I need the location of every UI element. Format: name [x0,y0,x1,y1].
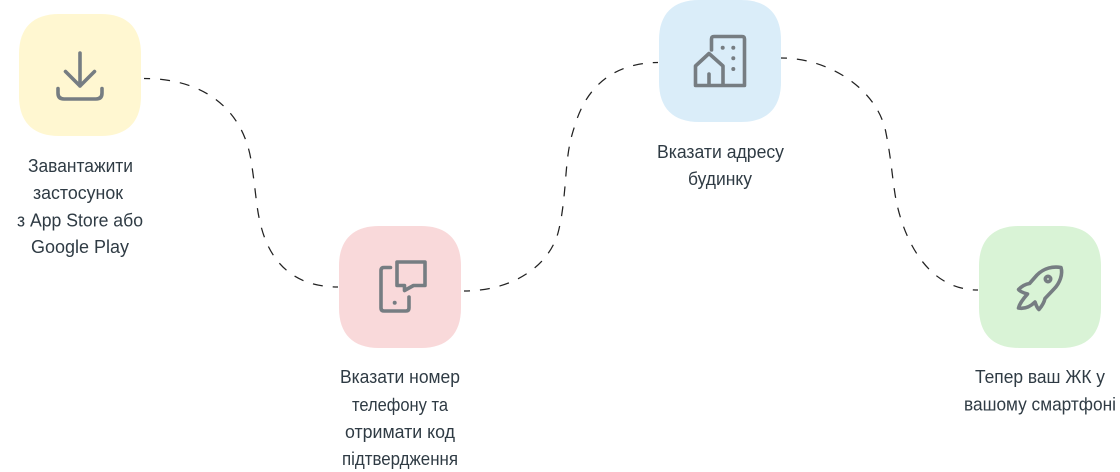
text: step 3 label [657,142,784,189]
text: step 1 label: з App Store або [17,210,143,230]
text: step 4 label: Тепер ваш ЖК у [975,367,1105,387]
text: step 2 label: телефону та [352,395,449,415]
text: step 4 label: вашому смартфоні [964,394,1116,414]
tile: yellow [19,14,141,136]
tile: green [979,226,1101,348]
tile: blue [659,0,781,122]
icon: phone with message bubble [381,262,425,311]
step 4: ready [964,226,1116,414]
step 1: download app [17,14,143,257]
connector: step 2 to step 3 [464,62,658,291]
text: step 3 label: будинку [688,169,752,189]
text: step 3 label: Вказати адресу [657,142,784,162]
text: step 2 label: отримати код [345,422,455,442]
icon: house and building [696,36,744,86]
text: step 1 label: Завантажити [28,156,133,176]
text: step 1 label: Google Play [31,237,129,257]
connector: step 3 to step 4 [781,58,978,290]
icon: download [58,53,102,99]
connector: step 1 to step 2 [144,78,338,287]
text: step 2 label [340,367,460,469]
text: step 2 label: підтвердження [342,449,458,469]
text: step 1 label [17,156,143,257]
tile: pink [339,226,461,348]
text: step 2 label: Вказати номер [340,367,460,387]
step 2: phone number [339,226,461,469]
icon: rocket [1018,267,1062,310]
text: step 4 label [964,367,1116,414]
step 3: building address [657,0,784,189]
text: step 1 label: застосунок [33,183,123,203]
